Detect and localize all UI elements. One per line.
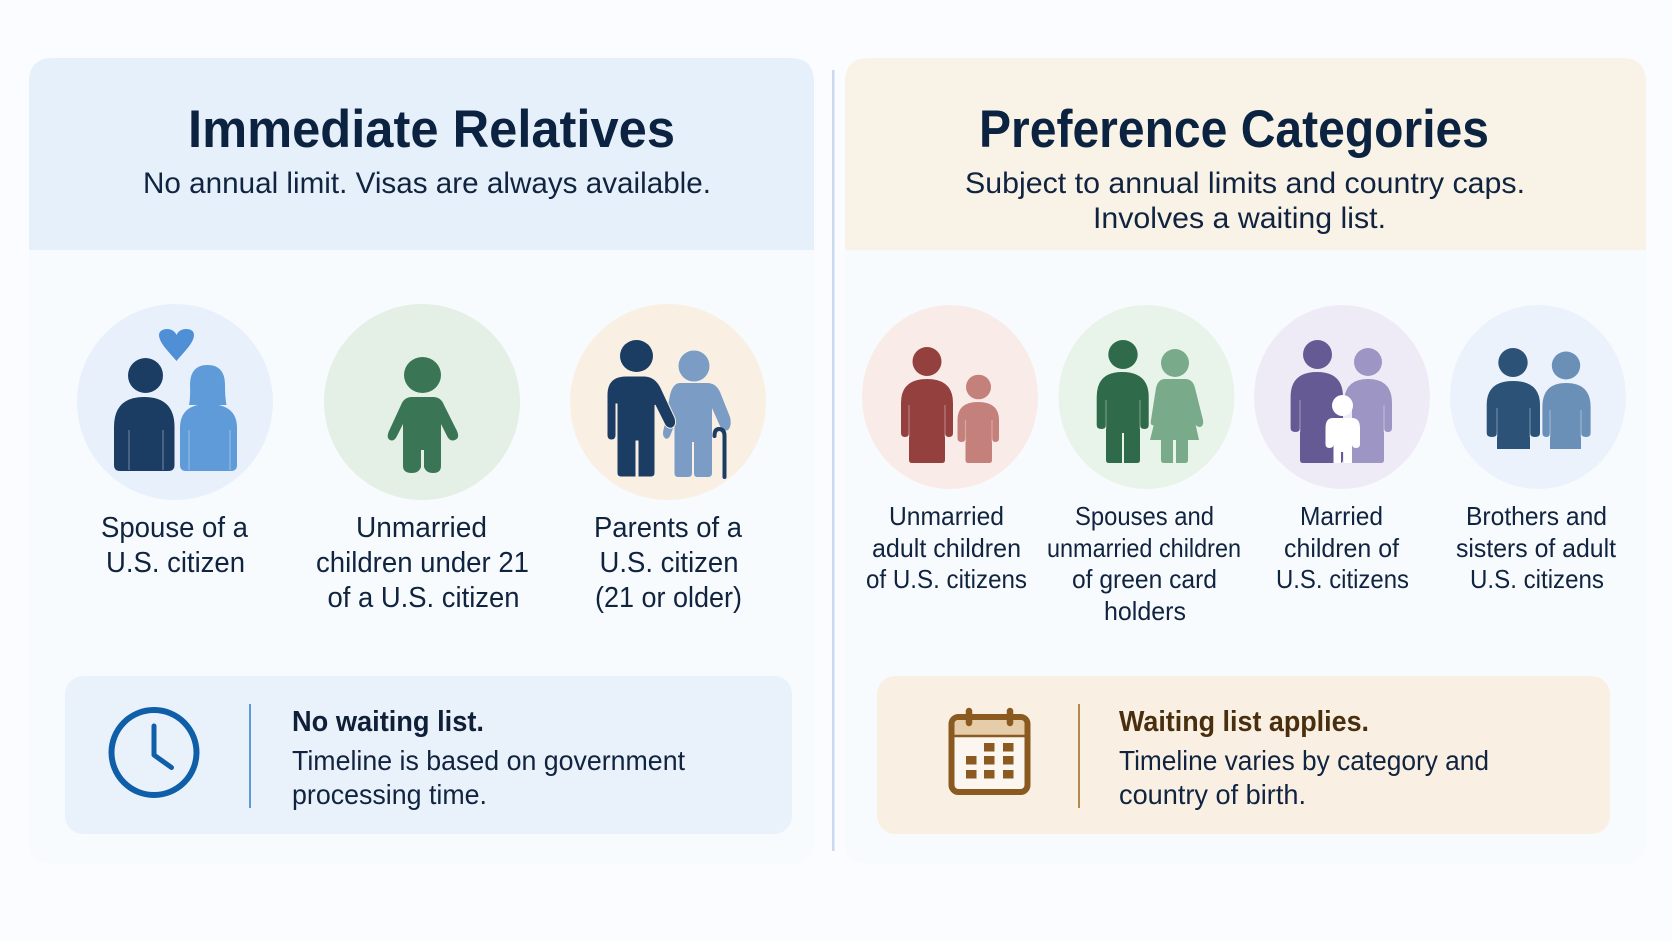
label: brothers and sisters bbox=[1456, 501, 1617, 594]
label: parents bbox=[594, 512, 743, 614]
icon: couple in green bbox=[1097, 340, 1203, 463]
subheading: annual limits: Subject to annual limits and country caps. bbox=[965, 167, 1525, 200]
label: unmarried adult children: of U.S. citizens bbox=[866, 564, 1027, 594]
label: spouse bbox=[101, 512, 249, 579]
category: unmarried adult children bbox=[862, 305, 1038, 594]
label: married children bbox=[1276, 501, 1409, 594]
callout: waiting list applies bbox=[877, 676, 1610, 834]
panel: immediate relatives bbox=[29, 58, 814, 864]
label: parents: (21 or older) bbox=[595, 582, 742, 614]
label: married children: U.S. citizens bbox=[1276, 564, 1409, 594]
subheading: no annual limit: No annual limit. Visas are always available. bbox=[143, 167, 711, 200]
label: spouses and unmarried children: unmarried children bbox=[1047, 533, 1241, 563]
heading: preference categories: Preference Categories bbox=[979, 100, 1489, 159]
icon: child bbox=[388, 357, 458, 473]
category: unmarried children under 21 bbox=[316, 304, 529, 614]
icon: parent and adult child bbox=[901, 347, 999, 463]
label: unmarried children: Unmarried bbox=[356, 512, 487, 544]
callout text: No waiting list. bbox=[292, 706, 484, 738]
category: married children bbox=[1254, 305, 1430, 594]
label: spouses and unmarried children bbox=[1047, 501, 1241, 626]
subheading: annual limits: Involves a waiting list. bbox=[1093, 202, 1386, 235]
callout text bbox=[1119, 706, 1489, 810]
label: brothers and sisters: U.S. citizens bbox=[1470, 564, 1604, 594]
icon: couple with heart bbox=[114, 329, 237, 471]
label: unmarried children: of a U.S. citizen bbox=[328, 582, 520, 614]
icon: siblings bbox=[1487, 348, 1591, 449]
label: spouse: Spouse of a bbox=[101, 512, 249, 544]
label: parents: U.S. citizen bbox=[600, 547, 738, 579]
callout: no waiting list bbox=[65, 676, 792, 834]
label: spouses and unmarried children: of green card bbox=[1072, 564, 1217, 594]
subheading: annual limits bbox=[965, 167, 1525, 235]
heading: immediate relatives: Immediate Relatives bbox=[188, 100, 675, 159]
panel header: preference categories bbox=[845, 58, 1646, 250]
label: unmarried adult children: adult children bbox=[872, 533, 1021, 563]
category: spouse of a U.S. citizen bbox=[77, 304, 273, 579]
callout text: country of birth. bbox=[1119, 779, 1306, 810]
callout text: processing time. bbox=[292, 779, 487, 810]
category: spouses and unmarried children of green card holders bbox=[1047, 305, 1241, 626]
callout text: Waiting list applies. bbox=[1119, 706, 1369, 738]
icon: clock bbox=[112, 710, 196, 795]
icon: family of three bbox=[1291, 340, 1392, 463]
callout text: Timeline varies by category and bbox=[1119, 745, 1489, 776]
category: parents of a U.S. citizen bbox=[570, 304, 766, 614]
callout text bbox=[292, 706, 685, 810]
category: brothers and sisters bbox=[1450, 305, 1626, 594]
label: unmarried adult children: Unmarried bbox=[889, 501, 1004, 531]
callout text: Timeline is based on government bbox=[292, 745, 685, 776]
label: unmarried children: children under 21 bbox=[316, 547, 529, 579]
label: brothers and sisters: sisters of adult bbox=[1456, 533, 1617, 563]
label: married children: children of bbox=[1284, 533, 1400, 563]
label: married children: Married bbox=[1300, 501, 1383, 531]
icon: adult helping parent with cane bbox=[607, 340, 731, 477]
label: unmarried adult children bbox=[866, 501, 1027, 594]
label: unmarried children bbox=[316, 512, 529, 614]
label: spouses and unmarried children: Spouses and bbox=[1075, 501, 1214, 531]
label: parents: Parents of a bbox=[594, 512, 743, 544]
icon: calendar bbox=[951, 711, 1028, 792]
panel header: immediate relatives bbox=[29, 58, 814, 250]
label: brothers and sisters: Brothers and bbox=[1466, 501, 1607, 531]
label: spouse: U.S. citizen bbox=[106, 547, 245, 579]
label: spouses and unmarried children: holders bbox=[1104, 596, 1186, 626]
panel: preference categories bbox=[845, 58, 1646, 864]
